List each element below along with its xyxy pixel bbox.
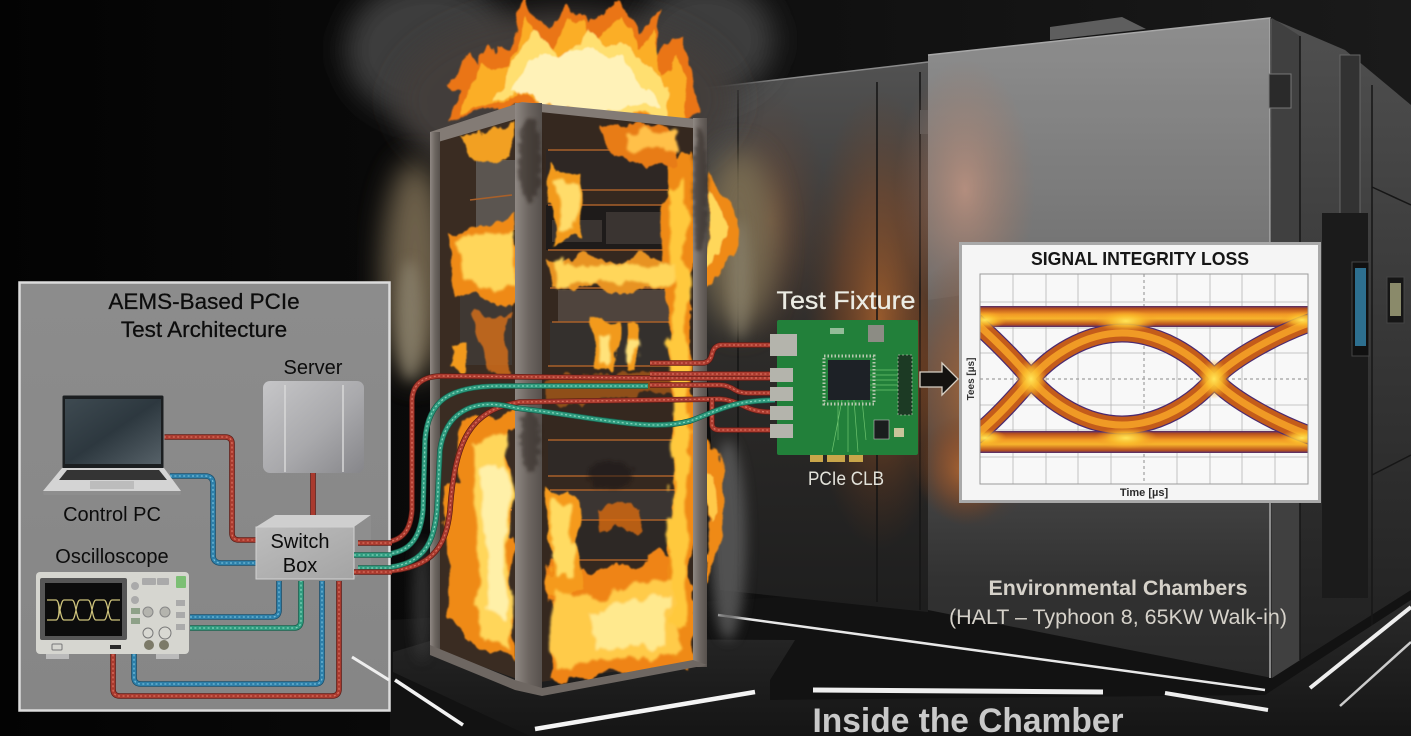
chart card: signal integrity loss (960, 244, 1324, 502)
red cables (366, 345, 770, 572)
heading: test fixture: Test Fixture (776, 287, 916, 315)
heading: panel title: Test Architecture (121, 317, 287, 342)
main chamber door (895, 17, 1272, 678)
rack cables (366, 345, 775, 572)
label: oscilloscope: Oscilloscope (55, 546, 169, 568)
label: control PC: Control PC (63, 504, 161, 526)
flames inside rack (445, 122, 692, 680)
chamber side wall and controls (1269, 18, 1411, 678)
heading: panel title: AEMS-Based PCIe (108, 289, 300, 314)
arrow to signal chart (920, 363, 958, 395)
eye diagram (963, 274, 1324, 484)
flames outer right (704, 165, 742, 590)
y axis label: Tees [µs] (966, 358, 977, 400)
centre pillar (515, 103, 542, 690)
label: server: Server (284, 357, 343, 379)
gold edge fingers (810, 455, 863, 462)
teal cables (366, 386, 775, 568)
server units (460, 150, 683, 666)
rear chamber (690, 62, 955, 612)
label: PCIe CLB: PCIe CLB (808, 469, 884, 490)
right pillar (693, 118, 707, 667)
frame top (430, 102, 706, 142)
soot marks (519, 118, 707, 489)
flame cores (452, 132, 688, 670)
icon: switch box (256, 515, 371, 579)
shelf lines (462, 150, 676, 560)
switch box output cables (354, 543, 392, 572)
smoke (345, 0, 776, 660)
label: environmental chambers: (HALT – Typhoon 8, 65KW Walk-in) (949, 606, 1287, 629)
connectors (770, 334, 797, 438)
platform (393, 600, 1411, 736)
icon: server (263, 381, 364, 473)
test fixture PCB (770, 320, 918, 462)
flames above rack (445, 0, 695, 122)
frame bottom (430, 645, 707, 696)
left pillar (430, 132, 440, 650)
label: switch box: Box (283, 555, 317, 577)
rack interior (436, 108, 698, 682)
icon: oscilloscope (36, 572, 189, 659)
icon: laptop (43, 395, 181, 495)
heading: chart title: SIGNAL INTEGRITY LOSS (1031, 248, 1249, 269)
x axis label: Time [µs] (1120, 487, 1168, 499)
burning server rack (430, 102, 707, 696)
panel: AEMS-based PCIe test architecture (20, 282, 390, 710)
label: environmental chambers: Environmental Chambers (988, 577, 1248, 600)
processor chip (824, 356, 874, 404)
panel cables (113, 437, 339, 696)
floor (390, 560, 1411, 736)
label: switch box: Switch (271, 531, 329, 553)
pin header (898, 355, 912, 415)
